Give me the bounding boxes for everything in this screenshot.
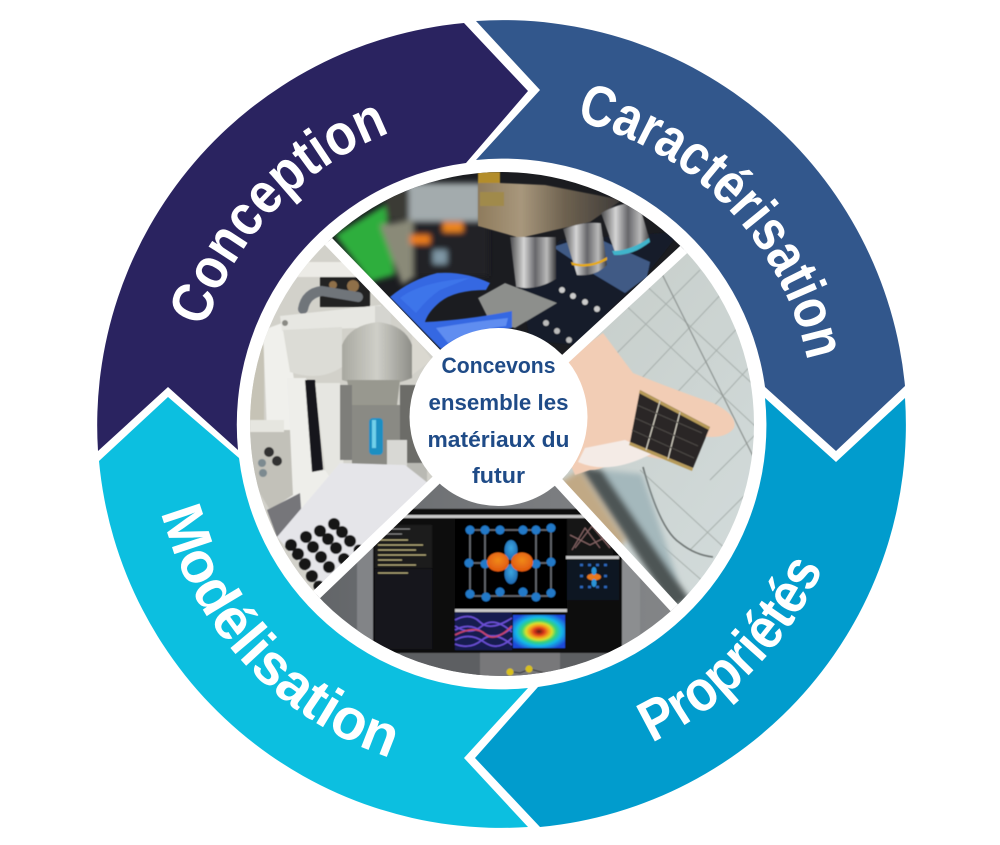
central text: Concevons: [442, 353, 556, 378]
turret: [478, 182, 622, 238]
housing: [283, 327, 342, 376]
label: Modélisation: Modélisation: [162, 504, 396, 757]
photo collage: [250, 172, 754, 676]
beige wedge: [412, 344, 413, 374]
monitor frame: [373, 509, 622, 653]
white column: [263, 324, 294, 502]
code panel: [375, 525, 432, 568]
central message: [410, 328, 588, 506]
side charts: [567, 519, 613, 555]
central text: matériaux du: [428, 427, 570, 452]
stand and yellow spheres: [507, 669, 545, 673]
window with dark recess: [298, 262, 356, 278]
white strip at left: [250, 345, 264, 420]
cycle diagram: [97, 20, 906, 828]
heat map: [512, 626, 514, 645]
arm: [280, 305, 381, 331]
sample: [478, 283, 557, 328]
photo: microscope and blue glove: [328, 172, 684, 355]
photo: computer screen with crystal simulation: [316, 484, 674, 676]
solar cell: [630, 390, 710, 468]
label: Caractérisation: Caractérisation: [582, 86, 836, 358]
blue vial: [369, 418, 383, 455]
silver head: [342, 322, 412, 386]
hose: [303, 291, 358, 309]
perforated table: [277, 463, 433, 590]
arrow: Propriétés: [475, 398, 906, 827]
arrow: Conception: [97, 23, 528, 451]
rack: [250, 430, 293, 510]
photo: solar cell held in glove: [562, 250, 754, 608]
arrow: Modélisation: [99, 397, 528, 828]
band diagram: [455, 612, 512, 650]
divider cross: [313, 238, 687, 612]
central text: futur: [472, 463, 525, 488]
central text: [428, 353, 570, 488]
metal parts: [387, 440, 407, 467]
stage: [520, 232, 680, 345]
glove: [390, 273, 512, 349]
gloved fingers: [560, 333, 735, 475]
arrow: Caractérisation: [476, 20, 905, 451]
black caps: [285, 518, 364, 592]
central text: ensemble les: [428, 390, 568, 415]
label: Conception: Conception: [172, 108, 388, 320]
label: Propriétés: Propriétés: [636, 560, 820, 742]
photo: laboratory robot: [250, 244, 433, 594]
crystal panel: [455, 519, 567, 609]
objectives: [510, 237, 556, 288]
dark box: [267, 493, 302, 537]
